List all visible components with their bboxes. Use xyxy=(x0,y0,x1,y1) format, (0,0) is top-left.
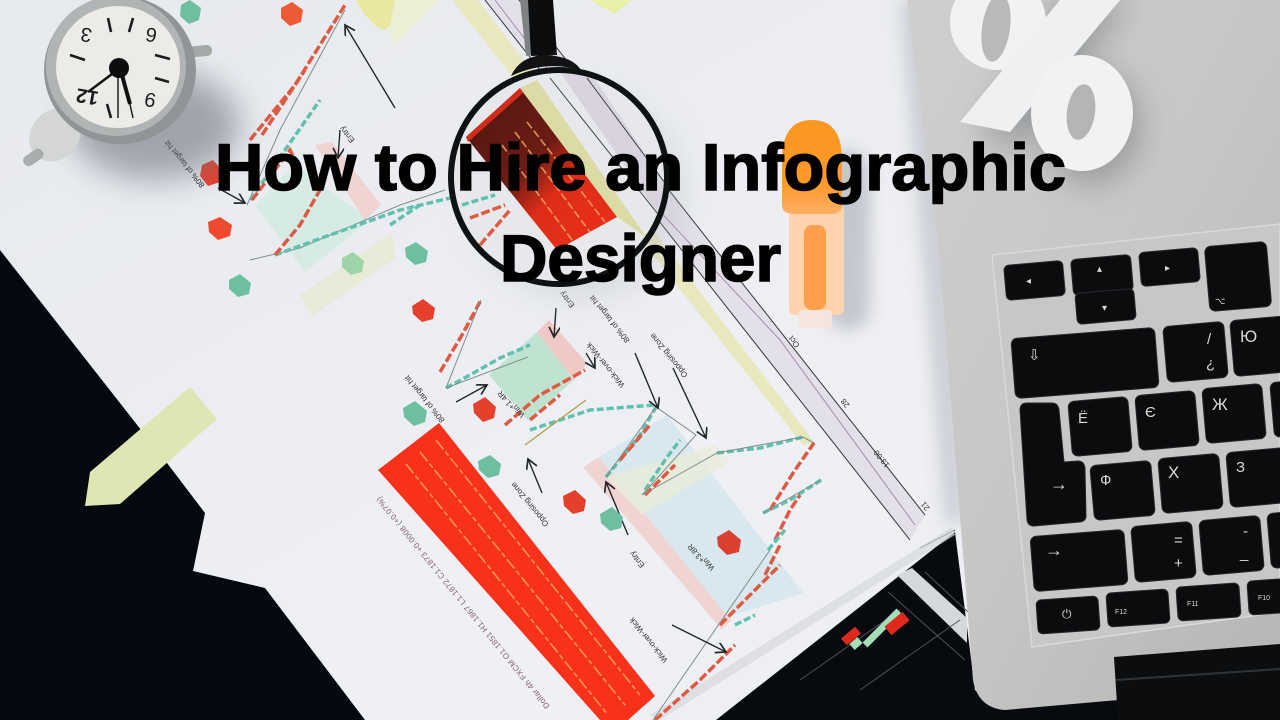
annotation labels: +1.4R xyxy=(496,389,517,411)
key legends: ⌥ xyxy=(1215,296,1225,306)
lens rim xyxy=(451,70,667,284)
annotation labels: Opposing Zone xyxy=(509,480,551,528)
knob xyxy=(180,45,212,58)
purple indicator band xyxy=(485,0,925,540)
small highlighter at top xyxy=(355,0,632,30)
alarm clock xyxy=(19,0,212,172)
trackpad hinge strip xyxy=(1114,644,1280,720)
orange highlighter xyxy=(782,120,870,330)
case xyxy=(44,0,196,144)
key legends: Ж xyxy=(1212,395,1228,414)
paper edge shadow xyxy=(650,527,955,720)
annotation labels: 80% of target hit xyxy=(402,373,447,424)
key legends: + xyxy=(1174,555,1183,572)
top chart panel xyxy=(247,0,450,316)
key legends: = xyxy=(1174,532,1183,549)
key legends: - xyxy=(1243,523,1248,540)
key legends: ▴ xyxy=(1097,264,1102,275)
annotation labels: 80% of target hit xyxy=(162,138,207,189)
percent sign xyxy=(950,0,1133,171)
annotation labels xyxy=(162,124,932,664)
percent sign shadow xyxy=(980,0,1140,183)
annotation labels: 21 xyxy=(919,499,932,512)
lens content xyxy=(462,73,664,281)
lens yellow band xyxy=(520,80,647,238)
annotation labels: +3.8R xyxy=(686,542,707,564)
key legends: ▾ xyxy=(1102,303,1107,314)
clock shadow xyxy=(70,70,240,180)
annotation labels: Win xyxy=(701,556,717,572)
laptop body xyxy=(907,0,1280,720)
keyboard keys xyxy=(1004,241,1280,634)
magnifier neck xyxy=(511,55,581,76)
annotation arrows xyxy=(218,25,726,652)
price candles xyxy=(247,10,445,260)
key legends: ◂ xyxy=(1026,276,1031,287)
lens notice text xyxy=(502,122,605,240)
key legends: ⏻ xyxy=(1062,607,1072,621)
key legends: ▸ xyxy=(1165,263,1170,274)
annotation labels: Wick-over-Wick xyxy=(584,340,627,389)
key legends: Ё xyxy=(1078,410,1088,427)
annotation labels: Entry xyxy=(558,289,577,309)
bell xyxy=(19,98,91,172)
banner footer text: Dollar 4h FXCM O1.1851 H1.1867 L1.1872 C1.1873 +0.0008 (+0.07%) xyxy=(374,495,552,710)
sticky note xyxy=(85,387,217,506)
yellow band xyxy=(452,0,815,445)
barrel xyxy=(789,205,844,315)
handle xyxy=(520,0,557,56)
annotation labels: Oct xyxy=(786,333,802,349)
clock numerals and ticks xyxy=(70,18,170,118)
key legends: → xyxy=(1050,474,1068,494)
chart zones xyxy=(255,165,370,272)
screen candles xyxy=(844,611,906,647)
laptop shadow on paper xyxy=(900,0,965,525)
lens candles xyxy=(480,210,510,245)
glass shadow xyxy=(475,90,685,300)
lower chart panel xyxy=(583,407,821,720)
black desk corner xyxy=(0,250,365,720)
cap xyxy=(782,120,842,214)
annotation labels: Win xyxy=(511,403,527,419)
key legends: Ф xyxy=(1100,472,1111,489)
middle chart panel xyxy=(440,300,655,445)
highlighter shadow xyxy=(825,150,870,330)
annotation labels: Opposing Zone xyxy=(648,331,690,379)
lens red notice xyxy=(466,88,617,250)
clock numerals and ticks: 3 xyxy=(79,22,94,46)
annotation labels: 13:00 xyxy=(872,448,892,469)
key legends: З xyxy=(1236,459,1245,476)
title: Designer xyxy=(500,221,781,295)
key legends: Ю xyxy=(1240,327,1257,346)
keyboard well xyxy=(992,224,1280,647)
red notice banner xyxy=(378,423,655,720)
key legends: / xyxy=(1207,331,1212,348)
key legends: ⇩ xyxy=(1028,347,1041,364)
annotation labels: 28 xyxy=(839,396,852,409)
key legends: F12 xyxy=(1115,609,1127,616)
dark trading screen xyxy=(716,530,1118,720)
title: How to Hire an Infographic xyxy=(215,130,1066,204)
annotation labels: 80% of target hit xyxy=(587,293,632,344)
annotation labels: Entry xyxy=(338,124,357,144)
key legends: ¿ xyxy=(1206,355,1215,372)
clock hands xyxy=(88,68,133,118)
face xyxy=(56,6,180,128)
key legends: → xyxy=(1045,540,1063,560)
title xyxy=(215,130,1066,295)
magnifying glass xyxy=(440,0,685,300)
clock numerals and ticks: 12 xyxy=(74,83,100,109)
key legends: F10 xyxy=(1258,595,1270,602)
clock numerals and ticks: 6 xyxy=(144,22,159,46)
key legends: F11 xyxy=(1187,601,1199,608)
annotation labels: Wick-over-Wick xyxy=(627,615,670,664)
key legends: Є xyxy=(1145,404,1156,421)
key legends: _ xyxy=(1239,545,1249,562)
key legends xyxy=(1026,263,1270,621)
lens purple band xyxy=(561,73,664,213)
clock numerals and ticks: 9 xyxy=(143,87,158,111)
annotation labels: Entry xyxy=(628,549,647,569)
key legends: Х xyxy=(1168,463,1179,482)
trade markers xyxy=(180,0,741,555)
